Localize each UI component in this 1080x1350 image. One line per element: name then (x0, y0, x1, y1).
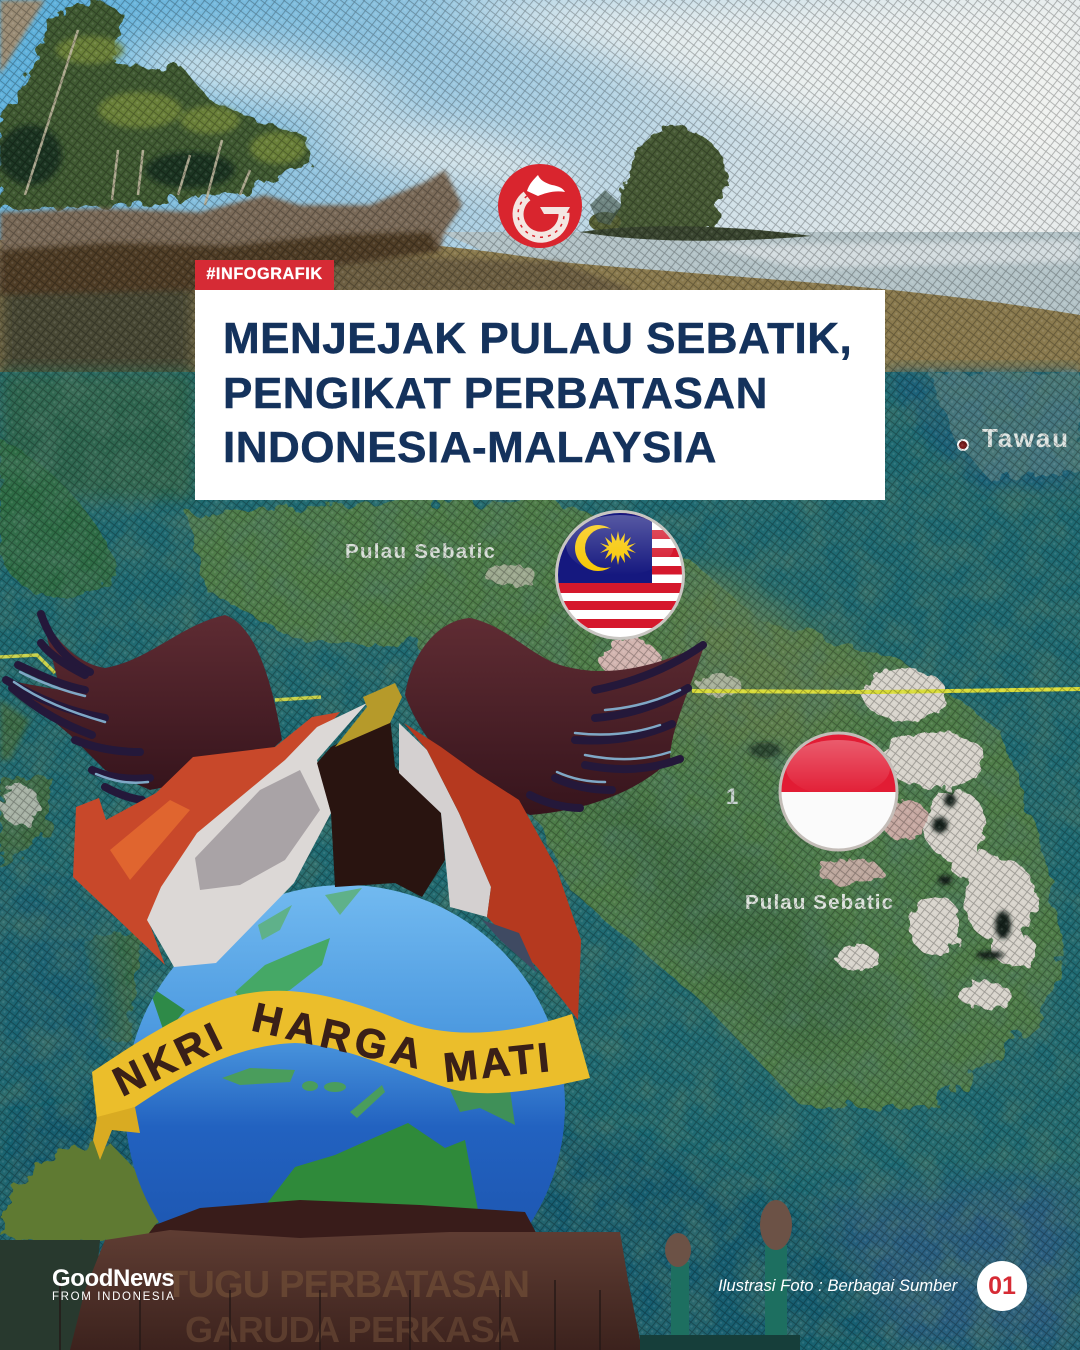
shrub (0, 1143, 160, 1245)
Indonesia flag badge (778, 732, 898, 852)
fence posts (640, 1200, 800, 1350)
banner: NKRI HARGA MATI: MATI (441, 1034, 551, 1091)
banner: NKRI HARGA MATI: HARGA (248, 994, 426, 1077)
photo credit: Ilustrasi Foto : Berbagai Sumber (718, 1276, 957, 1295)
satellite map: Pulau Sebatic (745, 891, 893, 914)
title panel (195, 290, 885, 500)
brand logo: GoodNews (52, 1265, 174, 1292)
category tag: #INFOGRAFIK (206, 265, 323, 283)
monument: Garuda on globe: GARUDA PERKASA (185, 1309, 520, 1350)
page number: 01 (988, 1272, 1016, 1300)
right white flag (399, 723, 491, 917)
title: INDONESIA-MALAYSIA (223, 423, 717, 472)
stone base (140, 1200, 540, 1245)
right wing (405, 618, 705, 815)
right red flag (404, 723, 581, 1020)
globe (125, 885, 565, 1325)
driftwood log (0, 170, 462, 285)
satellite map: Pulau Sebatic (345, 540, 495, 563)
palm trees (0, 0, 312, 210)
title: PENGIKAT PERBATASAN (223, 368, 768, 418)
eagle head (335, 683, 402, 747)
left wing (5, 612, 282, 790)
monument: Garuda on globe: TUGU PERBATASAN (165, 1264, 530, 1306)
cleared land patches (0, 565, 1037, 1009)
map labels (958, 440, 968, 450)
sky and beach photo (0, 0, 1080, 380)
monument: Garuda on globe (0, 612, 800, 1350)
Malaysia flag badge (555, 510, 690, 640)
main island (190, 500, 1062, 1110)
fence rails (60, 1280, 600, 1350)
border line (692, 689, 1080, 692)
page number (977, 1261, 1027, 1311)
white flag, left (147, 703, 367, 967)
banner: NKRI HARGA MATI (92, 991, 590, 1160)
satellite map (0, 372, 1080, 1350)
category tag (195, 260, 334, 290)
satellite map: 1 (726, 784, 738, 809)
logo emblem (498, 164, 582, 248)
island rock with trees (612, 128, 727, 235)
satellite map: Tawau (982, 423, 1068, 453)
title (223, 314, 852, 472)
eagle body (317, 717, 445, 897)
banner: NKRI HARGA MATI: NKRI (106, 1014, 228, 1105)
map mottling (0, 372, 1080, 1350)
brand logo: FROM INDONESIA (52, 1291, 175, 1303)
red flag, left (73, 712, 340, 965)
title: MENJEJAK PULAU SEBATIK, (223, 314, 852, 363)
